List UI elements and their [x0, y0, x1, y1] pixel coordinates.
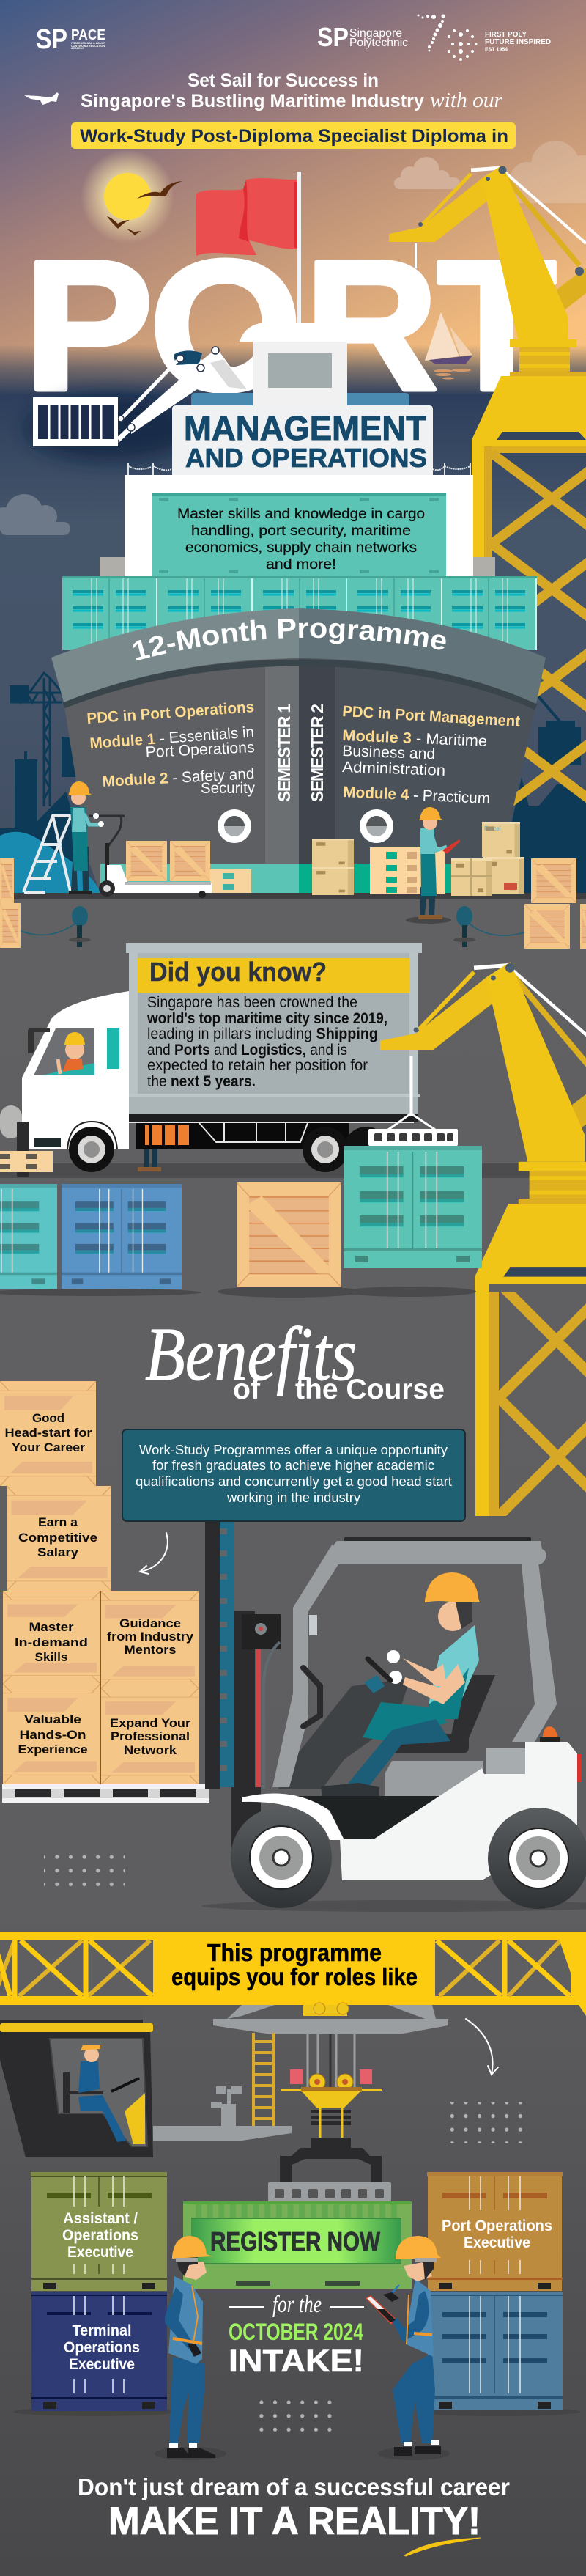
dark glow behind excavator cage — [26, 396, 194, 462]
road shadow — [0, 1163, 586, 1178]
text: semester labels: SEMESTER 1 — [275, 704, 294, 802]
heading: set sail for success: with our — [430, 89, 502, 112]
panel: programme intro on teal container: Master skills and knowledge in cargo — [177, 506, 425, 522]
crate: head-start: Good — [32, 1411, 64, 1425]
container: port operations executive: Executive — [464, 2234, 530, 2251]
truck cargo box — [126, 943, 422, 1114]
crate: guidance from mentors — [101, 1591, 199, 1688]
forklift body and wheels — [231, 1726, 586, 1909]
logo: SP PACE: CONTINUING EDUCATION — [71, 45, 105, 48]
heading: benefits of the course: the Course — [295, 1374, 445, 1405]
crate: hands-on experience: Valuable — [24, 1712, 81, 1726]
tagline: First Poly Future Inspired — [485, 30, 551, 53]
crate: hands-on experience: Hands-On — [19, 1728, 86, 1742]
did you know text: leading in pillars including Shipping — [147, 1026, 378, 1042]
did you know banner: Did you know? — [149, 957, 327, 987]
crane hoist and spreader — [268, 2034, 391, 2201]
crate: in-demand skills: In-demand — [15, 1635, 88, 1649]
crane hook rope — [415, 243, 417, 268]
tagline: First Poly Future Inspired: EST 1954 — [485, 45, 508, 53]
did you know text: and Ports and Logistics, and is — [147, 1042, 347, 1059]
container: register now: REGISTER NOW — [210, 2226, 380, 2256]
truck driver — [58, 1032, 85, 1074]
gantry beam with heading — [0, 1932, 586, 2016]
heading: this programme equips you: This programme — [207, 1939, 382, 1966]
logo: SP PACE: PACE — [71, 27, 105, 43]
text: PDC in port management — [342, 703, 521, 807]
plane icon — [24, 92, 59, 105]
text: PDC in port operations: Port Operations — [145, 739, 255, 761]
crate: professional network — [101, 1688, 199, 1784]
did you know banner — [138, 957, 409, 993]
heading: 12-month programme: 12-Month Programme — [133, 619, 446, 661]
worker with clipboard — [406, 807, 460, 924]
large wooden crate — [237, 1182, 341, 1287]
ship deck white block — [125, 475, 473, 576]
text: PDC in port operations: Module 1 - Essentials in — [89, 724, 255, 752]
panel: management and operations title — [172, 405, 433, 475]
containers: teal, blue, green — [0, 1146, 482, 1289]
cloud: far right — [493, 141, 586, 203]
crate: hands-on experience: Experience — [18, 1743, 88, 1756]
container: terminal operations executive — [31, 2292, 167, 2411]
container: terminal operations executive: Operations — [64, 2339, 140, 2356]
crane 2: hoist line and spreader — [368, 1056, 458, 1146]
container: steel blue — [428, 2292, 563, 2410]
ground background — [0, 893, 586, 2576]
sky background — [0, 0, 586, 396]
ladder — [23, 816, 71, 892]
forklift driver — [321, 1572, 495, 1800]
logo: Singapore Polytechnic: SP — [317, 22, 349, 52]
ship bridge — [191, 323, 409, 408]
crate: competitive salary: Earn a — [38, 1515, 78, 1529]
crate: guidance from mentors: Guidance — [119, 1616, 181, 1630]
sun — [81, 150, 174, 243]
heading: benefits of the course: of — [233, 1374, 261, 1405]
shadow beneath containers — [13, 2407, 580, 2416]
did you know text: expected to retain her position for — [147, 1057, 368, 1074]
logo: Singapore Polytechnic — [317, 22, 408, 52]
title word PORT: P — [24, 223, 153, 429]
crane hoist gantry — [153, 2003, 448, 2141]
truck cab — [0, 991, 129, 1177]
panel: programme intro on teal container: handling, port security, maritime — [191, 523, 411, 539]
pallet jack — [89, 816, 212, 898]
shadows under containers — [0, 1286, 476, 1298]
panel: programme intro on teal container: and more! — [266, 556, 336, 573]
wheels of the truck — [69, 1127, 389, 1172]
closing line: Don't just dream of a successful career — [78, 2473, 510, 2500]
crate: hands-on experience — [3, 1684, 100, 1784]
did you know text: Singapore has been crowned the — [147, 994, 357, 1011]
container: assistant operations executive — [31, 2172, 167, 2291]
heading: set sail for success — [81, 70, 502, 112]
text: PDC in port operations — [86, 699, 255, 797]
crate: in-demand skills: Skills — [35, 1650, 67, 1664]
sea and water background — [0, 345, 586, 900]
flag pole — [297, 172, 301, 323]
cloud: upper right — [394, 157, 460, 189]
ship railings — [128, 463, 470, 475]
container row on ship — [62, 576, 537, 650]
callout: work-study programmes: working in the industry — [226, 1490, 360, 1505]
logo: Singapore Polytechnic: Polytechnic — [349, 37, 408, 49]
text: semester labels: SEMESTER 2 — [308, 704, 327, 802]
crane 2: lattice legs — [475, 1267, 586, 1516]
logo: SP PACE: SP — [36, 24, 67, 55]
crane 1: boom and body — [389, 165, 586, 455]
crate: competitive salary: Salary — [37, 1545, 79, 1559]
crane 1: lattice legs — [472, 440, 586, 830]
heading: set sail for success: Singapore's Bustling Maritime Industry — [81, 91, 424, 111]
crane 2: boom and body — [380, 962, 586, 1294]
heading: this programme equips you: equips you for roles like — [171, 1963, 418, 1990]
forklift frame — [201, 1537, 586, 1912]
pallet under crates — [2, 1784, 209, 1803]
decorative dots — [44, 1846, 125, 1887]
text: PDC in port operations: Module 2 - Safety and — [102, 765, 255, 790]
heading: set sail for success: Set Sail for Success in — [188, 70, 379, 91]
legs of worker behind truck — [138, 1149, 161, 1171]
panel: programme intro on teal container — [152, 493, 446, 576]
logo: SP PACE: ACADEMY — [71, 47, 85, 50]
title word PORT: R — [305, 223, 438, 429]
title word PORT: T — [437, 223, 556, 429]
mooring bollards — [21, 906, 524, 947]
callout: work-study programmes: for fresh graduates to achieve higher academic — [152, 1458, 434, 1473]
ship hull — [51, 608, 546, 893]
container: assistant operations executive: Operations — [62, 2227, 138, 2244]
container: register now — [183, 2201, 412, 2289]
arrow: toward roles — [466, 2019, 498, 2075]
logo: SP PACE: PROFESSIONAL & ADULT — [71, 42, 105, 45]
flag — [196, 178, 297, 256]
panel: programme intro on teal container: economics, supply chain networks — [185, 540, 417, 556]
crate: professional network: Expand Your — [110, 1716, 190, 1730]
road band — [0, 832, 586, 899]
heading: this programme equips you — [171, 1939, 418, 1990]
engineer left — [155, 2236, 226, 2460]
callout: work-study programmes: qualifications and concurrently get a good head start — [136, 1474, 452, 1489]
panel: management and operations title: MANAGEMENT — [184, 409, 426, 447]
engineer right — [366, 2236, 450, 2460]
banner: work-study diploma: Work-Study Post-Diploma Specialist Diploma in — [80, 126, 508, 147]
cloud: lower left — [0, 494, 70, 535]
crate: head-start: Your Career — [12, 1440, 85, 1454]
crate: professional network: Network — [124, 1743, 177, 1757]
heading: benefits of the course: Benefits — [145, 1312, 357, 1396]
city silhouette: left — [0, 673, 88, 893]
text: PDC in port management: Module 4 - Practicum — [343, 784, 491, 807]
october 2024: OCTOBER 2024 — [229, 2319, 363, 2345]
cardboard boxes and pallet — [312, 822, 524, 896]
did you know text: world's top maritime city since 2019, — [146, 1010, 387, 1027]
crate: professional network: Professional — [111, 1729, 190, 1743]
callout: work-study programmes: Work-Study Programmes offer a unique opportunity — [139, 1443, 448, 1457]
container: assistant operations executive: Assistant / — [63, 2210, 138, 2227]
container: port operations executive — [427, 2172, 563, 2291]
wooden crates on the dock — [0, 841, 586, 949]
text: PDC in port management: PDC in Port Management — [342, 703, 521, 730]
arrow: from callout to crates — [140, 1533, 168, 1574]
container: port operations executive: Port Operations — [442, 2218, 552, 2234]
crate: competitive salary — [7, 1486, 111, 1591]
logo: SP PACE — [36, 24, 105, 55]
crane operator cab — [0, 2006, 153, 2157]
grey side blocks — [100, 557, 495, 576]
crate: in-demand skills: Master — [29, 1620, 74, 1634]
crate: guidance from mentors: Mentors — [125, 1643, 176, 1657]
truck chassis — [129, 1114, 418, 1149]
logo: 70 years dots — [418, 15, 478, 61]
logo: Singapore Polytechnic: Singapore — [349, 27, 402, 40]
text: PDC in port operations: Security — [201, 780, 255, 797]
city silhouette: right — [512, 696, 586, 893]
crate: guidance from mentors: from Industry — [107, 1630, 194, 1644]
panel: management and operations title: AND OPERATIONS — [185, 443, 427, 473]
swoosh underline — [404, 2538, 481, 2556]
container: terminal operations executive: Executive — [69, 2356, 135, 2373]
tagline: First Poly Future Inspired: FIRST POLY — [485, 30, 527, 39]
birds — [107, 181, 182, 235]
for the label: for the — [272, 2292, 322, 2318]
cardboard boxes and pallet: Parcel — [484, 825, 501, 832]
worker with pallet jack — [68, 781, 104, 894]
sailboat — [425, 312, 472, 380]
container: assistant operations executive: Executive — [67, 2244, 133, 2261]
did you know text: the next 5 years. — [147, 1073, 256, 1090]
text: PDC in port management: Module 3 - Maritime — [342, 727, 488, 750]
crate: in-demand skills — [3, 1591, 100, 1684]
intake: INTAKE! — [229, 2344, 364, 2379]
crane operator figure — [78, 2045, 139, 2142]
text: semester labels — [275, 704, 327, 802]
tagline: First Poly Future Inspired: FUTURE INSPIRED — [485, 37, 551, 46]
excavator arm and cage — [33, 347, 247, 446]
crate: head-start: Head-start for — [4, 1426, 92, 1440]
crate: head-start — [0, 1381, 96, 1486]
crate: competitive salary: Competitive — [18, 1531, 97, 1545]
title word PORT — [24, 223, 556, 429]
closing headline: MAKE IT A REALITY! — [108, 2500, 481, 2543]
title word PORT: O — [149, 223, 302, 429]
text: PDC in port management: Administration — [342, 759, 446, 779]
container: terminal operations executive: Terminal — [72, 2322, 132, 2339]
portholes — [218, 809, 393, 843]
callout: work-study programmes — [122, 1429, 465, 1521]
decorative dots — [259, 2399, 341, 2440]
did you know text — [146, 994, 387, 1090]
forklift mast — [205, 1521, 281, 1861]
text: PDC in port operations: PDC in Port Operations — [86, 699, 255, 727]
decorative dots — [448, 2102, 530, 2143]
text: PDC in port management: Business and — [342, 743, 436, 762]
